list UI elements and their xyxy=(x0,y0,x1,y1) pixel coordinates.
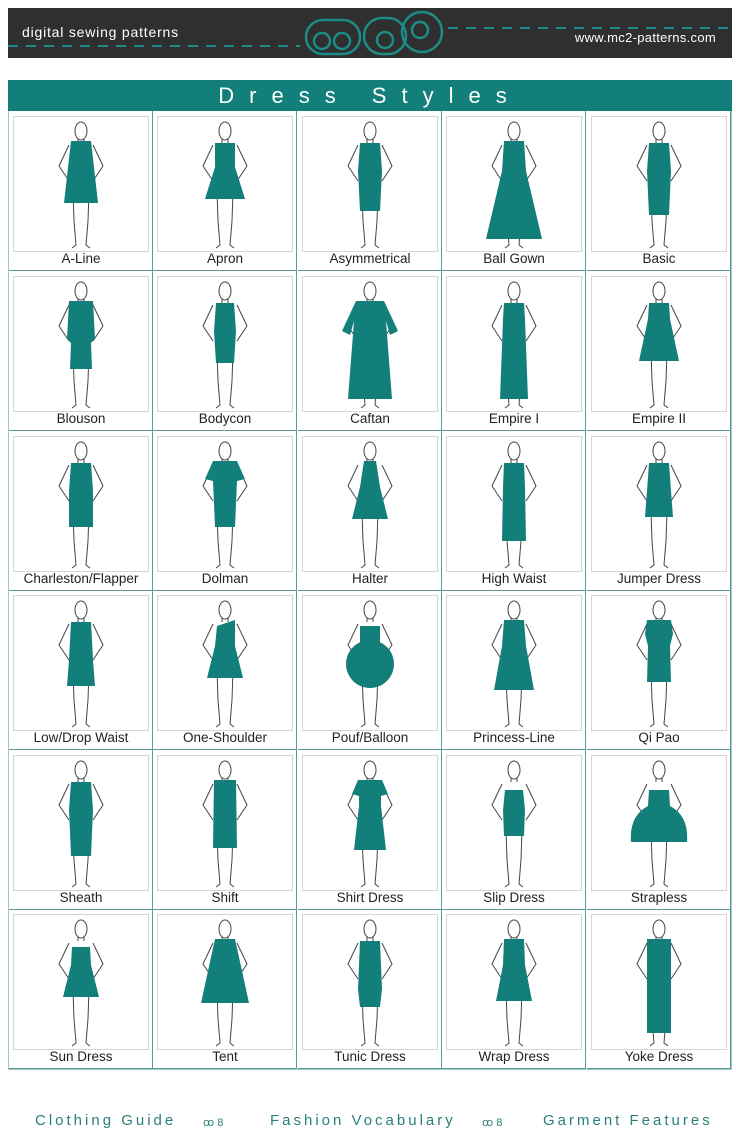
grid of dress styles: Dolman xyxy=(202,571,248,586)
row 5: Sheath xyxy=(60,890,102,905)
row 6: Sun Dress xyxy=(49,1049,113,1064)
row 6 xyxy=(9,909,153,1069)
header banner xyxy=(8,8,732,58)
grid of dress styles: Slip Dress xyxy=(483,890,545,905)
row 4: Low/Drop Waist xyxy=(34,730,128,745)
grid of dress styles: Bodycon xyxy=(199,411,251,426)
row 5 xyxy=(9,750,153,910)
grid of dress styles: Strapless xyxy=(631,890,687,905)
footer logo 2: ꝏ8 xyxy=(482,1117,505,1129)
grid of dress styles: Tunic Dress xyxy=(334,1049,406,1064)
grid of dress styles: Empire II xyxy=(632,411,686,426)
footer: garment features: Garment Features xyxy=(543,1112,713,1129)
grid of dress styles: Jumper Dress xyxy=(617,571,701,586)
grid of dress styles: Caftan xyxy=(350,411,390,426)
footer: fashion vocabulary: Fashion Vocabulary xyxy=(270,1112,456,1129)
title bar: Dress Styles xyxy=(218,83,522,108)
row 2: Blouson xyxy=(57,411,105,426)
grid of dress styles: Shirt Dress xyxy=(337,890,403,905)
grid of dress styles: High Waist xyxy=(482,571,546,586)
header url: www.mc2-patterns.com xyxy=(575,30,716,45)
footer: clothing guide: Clothing Guide xyxy=(35,1112,176,1129)
header left text: digital sewing patterns xyxy=(22,24,179,40)
grid of dress styles: Yoke Dress xyxy=(625,1049,693,1064)
grid of dress styles: Shift xyxy=(211,890,238,905)
title bar xyxy=(8,80,732,111)
grid of dress styles: Qi Pao xyxy=(638,730,680,745)
row 3: Charleston/Flapper xyxy=(24,571,138,586)
row 1: A-Line xyxy=(61,251,101,266)
grid of dress styles: One-Shoulder xyxy=(183,730,267,745)
grid of dress styles: Basic xyxy=(642,251,676,266)
row 3 xyxy=(9,431,153,591)
grid of dress styles: Asymmetrical xyxy=(329,251,410,266)
grid of dress styles: Ball Gown xyxy=(483,251,545,266)
grid of dress styles: Princess-Line xyxy=(473,730,555,745)
header dashed line and logo xyxy=(8,10,728,56)
grid of dress styles: Tent xyxy=(212,1049,238,1064)
grid of dress styles: Halter xyxy=(352,571,388,586)
row 2 xyxy=(9,271,153,431)
row 1 xyxy=(9,111,153,271)
grid of dress styles: Empire I xyxy=(489,411,539,426)
grid of dress styles: Wrap Dress xyxy=(478,1049,550,1064)
row 4 xyxy=(9,590,153,750)
grid of dress styles: Apron xyxy=(207,251,243,266)
footer logo 1: ꝏ8 xyxy=(203,1117,226,1129)
grid of dress styles: Pouf/Balloon xyxy=(332,730,408,745)
